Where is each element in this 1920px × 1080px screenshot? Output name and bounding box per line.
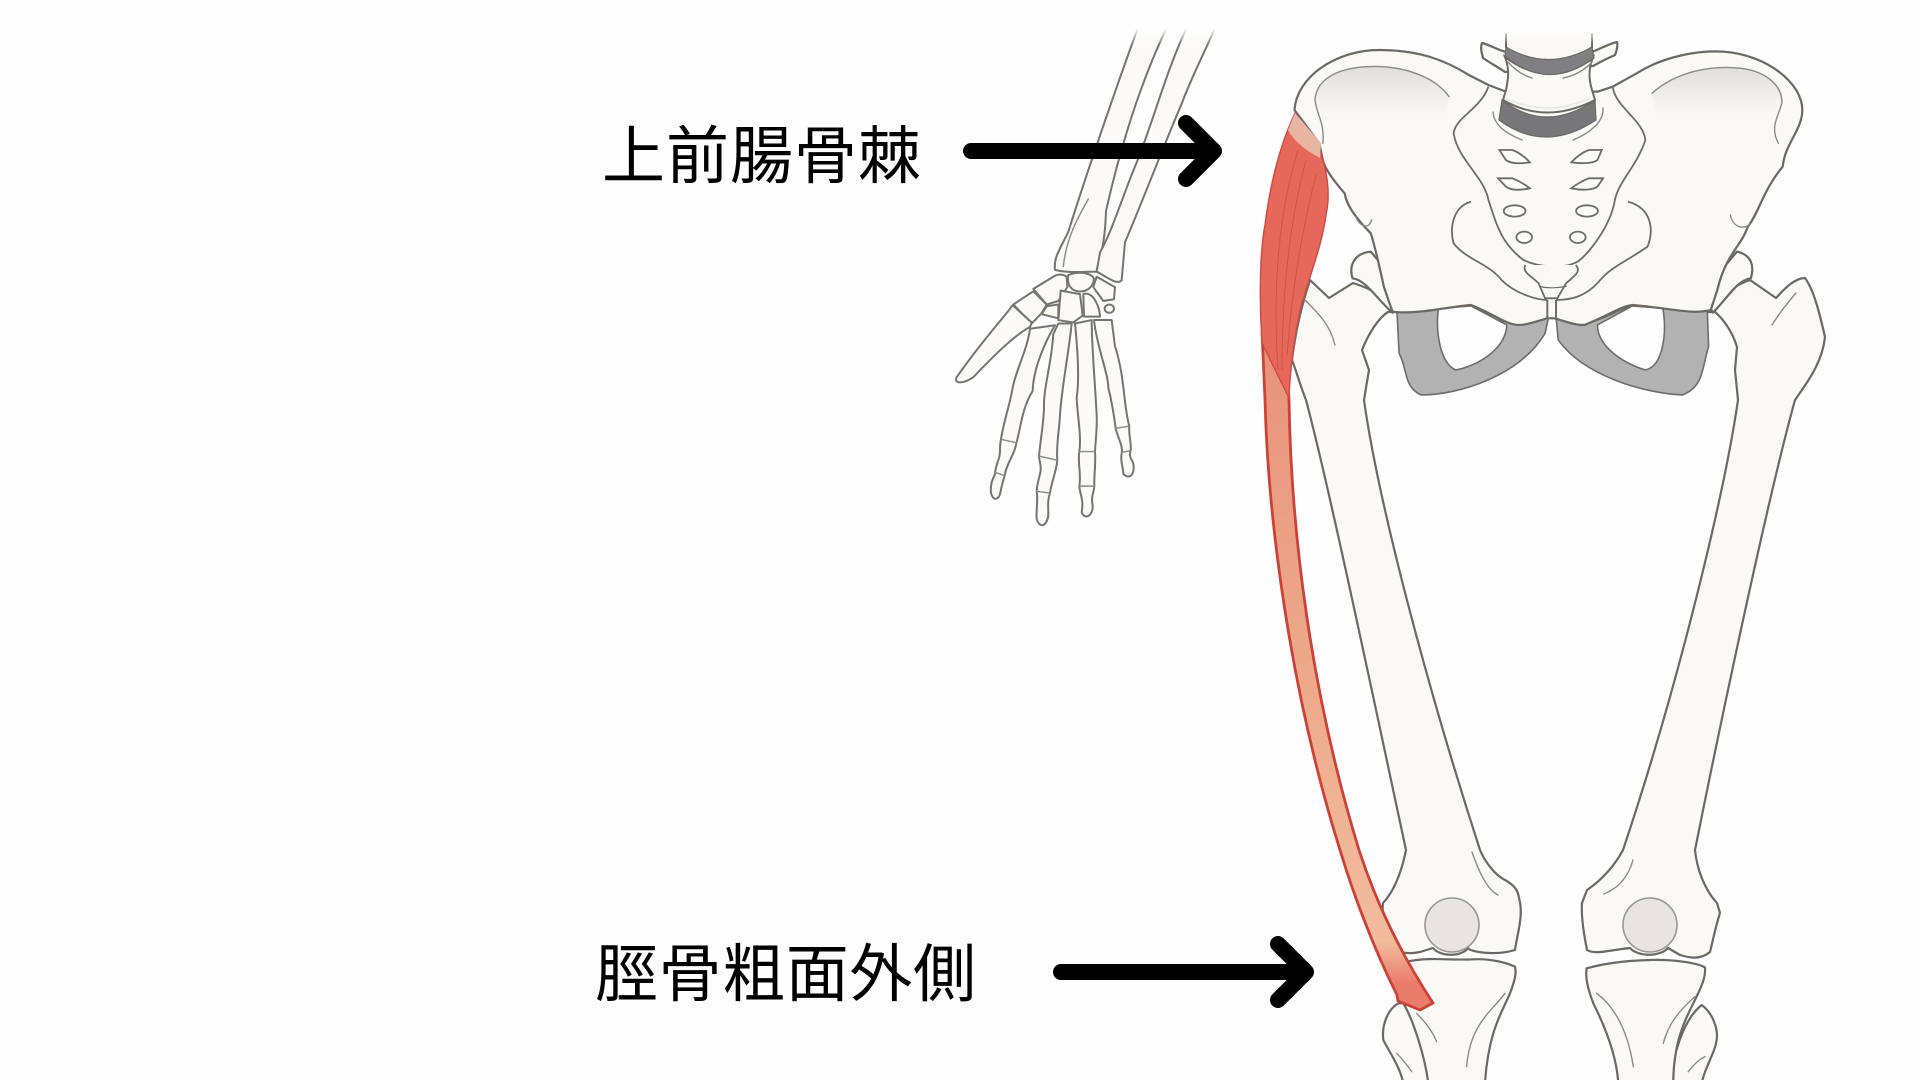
label: lateral tibial tuberosity: 脛骨粗面外側	[595, 940, 976, 1010]
arrow: to lateral tibial tuberosity	[1061, 944, 1306, 1000]
tensor fasciae latae belly	[1260, 113, 1328, 398]
label: anterior superior iliac spine: 上前腸骨棘	[602, 122, 921, 192]
lumbar vertebra and discs	[1481, 20, 1617, 140]
sacrum lines	[1452, 87, 1651, 318]
little finger	[1094, 320, 1134, 477]
fibula and tibia: right	[1586, 960, 1717, 1080]
iliotibial band	[1262, 331, 1433, 1010]
arrow: to anterior superior iliac spine	[971, 123, 1214, 179]
carpal bones	[1013, 273, 1115, 324]
pubis and obturator foramina	[1397, 305, 1709, 395]
middle finger	[1037, 324, 1072, 525]
patella: left	[1425, 898, 1479, 952]
fibula and tibia: left	[1383, 959, 1516, 1080]
forearm and hand skeleton	[956, 19, 1227, 525]
tendon origin highlight	[1288, 113, 1321, 158]
iliac fossae	[1315, 66, 1782, 227]
muscle fibres	[1276, 150, 1316, 370]
patella: right	[1623, 898, 1677, 952]
thumb	[956, 305, 1032, 382]
femoral heads	[1351, 252, 1752, 313]
pelvis	[1294, 50, 1802, 395]
index finger	[991, 325, 1055, 499]
ilium and sacrum outline	[1294, 50, 1802, 325]
forearm fade	[1127, 19, 1227, 45]
forearm bones	[1055, 24, 1217, 282]
sacral foramina	[1498, 150, 1603, 243]
ring finger	[1075, 320, 1097, 516]
femur: left of image	[1292, 280, 1521, 955]
muscle: tensor fasciae latae and iliotibial band	[1260, 113, 1433, 1010]
femur: right of image	[1582, 278, 1825, 958]
